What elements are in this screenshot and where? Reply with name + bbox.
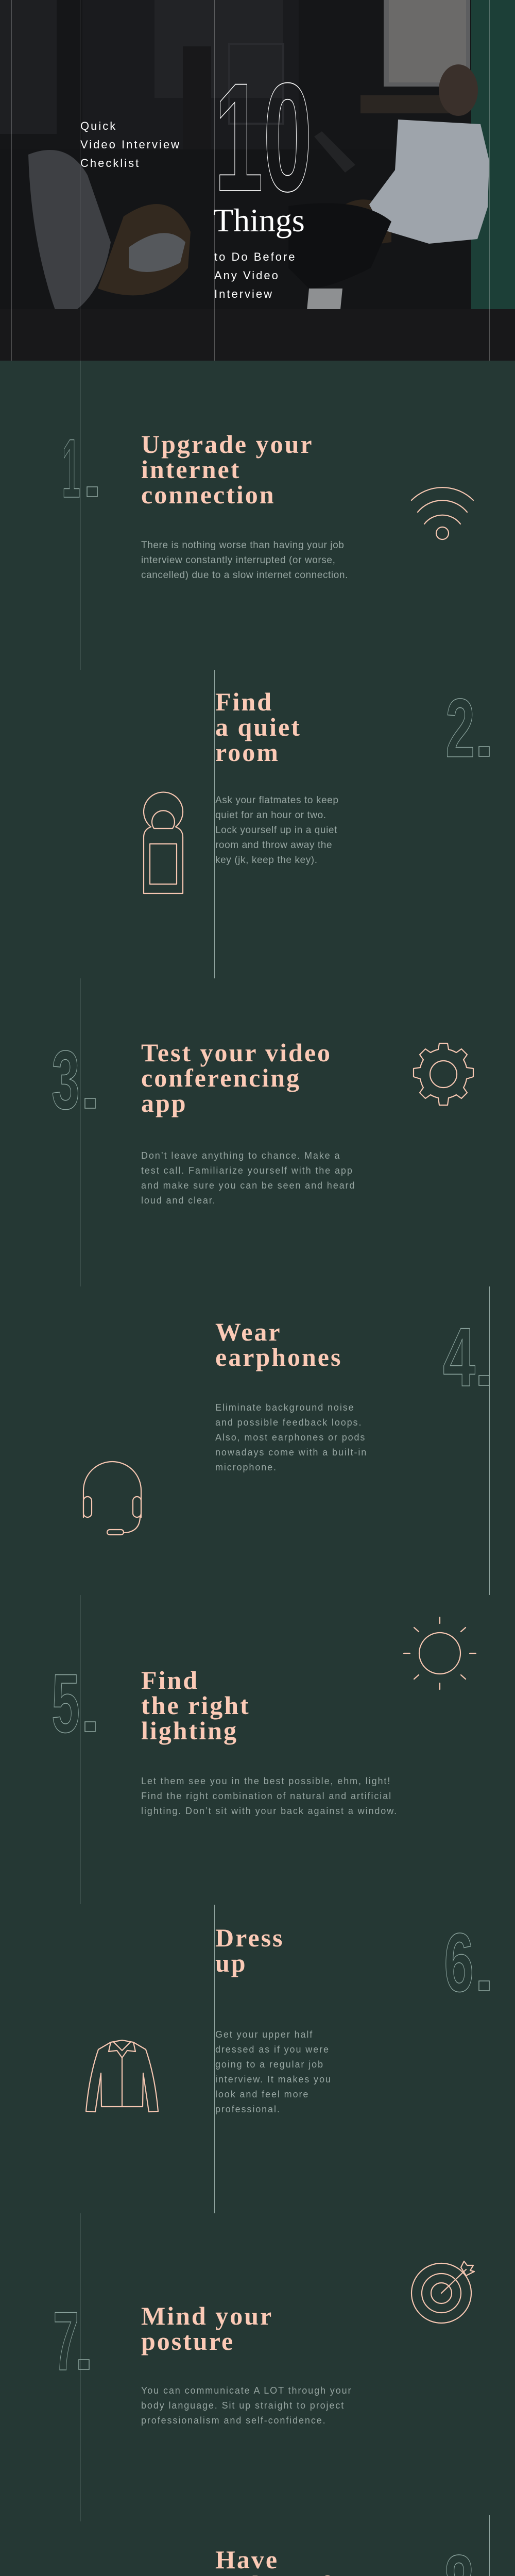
title 7: Mind your [141,2301,273,2330]
title 3 [141,1038,332,1117]
title 6: Dress [215,1923,284,1952]
icon: sun [403,1617,477,1690]
title 4 [215,1317,342,1371]
body 7: professionalism and self-confidence. [141,2415,327,2426]
icon: target [411,2261,475,2324]
section 7: posture [53,2213,475,2521]
body 2: quiet for an hour or two. [215,810,327,821]
body 3: loud and clear. [141,1195,216,1206]
header subtitle: Quick Video Interview Checklist: Checklist [80,157,140,170]
body 4 [215,1402,367,1472]
title 7 [141,2301,273,2355]
body 3: test call. Familiarize yourself with the app [141,1165,353,1176]
title 5: Find [141,1666,199,1694]
section 2: quiet room [143,670,490,978]
header title: Things: Things [213,202,305,239]
body 5: Let them see you in the best possible, ehm, light! [141,1776,391,1786]
body 4: Eliminate background noise [215,1402,355,1413]
body 4: and possible feedback loops. [215,1417,362,1428]
body 6: Get your upper half [215,2029,313,2040]
section 1: internet [62,361,474,670]
body 4: microphone. [215,1462,277,1472]
title 3: app [141,1089,187,1117]
body 7: You can communicate A LOT through your [141,2385,352,2396]
title 7: posture [141,2327,234,2355]
title 2: Find [215,687,273,716]
body 2: Lock yourself up in a quiet [215,825,337,836]
icon: door hanger [143,791,183,894]
body 5 [141,1776,398,1816]
body 6: going to a regular job [215,2059,324,2070]
section 3: test app [52,978,474,1286]
header subtitle: to Do Before Any Video Interview: to Do Before [214,250,297,263]
body 7 [141,2385,352,2426]
section 8: glass of water [215,2515,490,2576]
body 1: There is nothing worse than having your job [141,540,344,551]
title 4: earphones [215,1343,342,1371]
body 6 [215,2029,332,2114]
body 6: dressed as if you were [215,2044,330,2055]
title 1 [141,430,314,509]
title 2: room [215,738,280,767]
section 5: lighting [52,1595,477,1904]
body 5: Find the right combination of natural and artificial [141,1791,392,1801]
title 8 [215,2545,331,2576]
header subtitle: to Do Before Any Video Interview: Interview [214,287,273,300]
body 3 [141,1150,355,1206]
body 2 [215,795,338,866]
icon: jacket [85,2039,159,2112]
body 2: room and throw away the [215,840,332,851]
header subtitle: to Do Before Any Video Interview: Any Video [214,269,280,282]
icon: headset [82,1461,142,1535]
title 3: Test your video [141,1038,332,1067]
body 3: and make sure you can be seen and heard [141,1180,355,1191]
header subtitle: Quick Video Interview Checklist: Video Interview [80,138,181,151]
body 5: lighting. Don’t sit with your back against a window. [141,1806,398,1816]
header photo [0,0,515,361]
body 4: nowadays come with a built-in [215,1447,367,1458]
title 8: Have [215,2545,279,2574]
title 5 [141,1666,250,1745]
body 4: Also, most earphones or pods [215,1432,366,1443]
section 4: earphones [82,1286,490,1595]
body 2: Ask your flatmates to keep [215,795,338,806]
icon: gear [413,1043,474,1106]
title 5: the right [141,1691,250,1720]
title 1: internet [141,455,241,484]
title 1: connection [141,480,276,509]
body 2: key (jk, keep the key). [215,855,318,866]
body 3: Don’t leave anything to chance. Make a [141,1150,340,1161]
title 4: Wear [215,1317,282,1346]
body 1: interview constantly interrupted (or worse, [141,555,335,566]
title 5: lighting [141,1716,238,1745]
header subtitle: Quick Video Interview Checklist [80,120,181,170]
section 6: dress up [85,1905,490,2213]
icon: wifi [411,487,474,540]
body 1: cancelled) due to a slow internet connection. [141,570,348,581]
title 2 [215,687,301,767]
body 1 [141,540,348,581]
body 6: look and feel more [215,2089,309,2099]
body 6: professional. [215,2104,281,2114]
header subtitle: Quick Video Interview Checklist: Quick [80,120,117,132]
title 6: up [215,1948,247,1977]
header subtitle: to Do Before Any Video Interview [214,250,297,300]
title 3: conferencing [141,1063,301,1092]
title 1: Upgrade your [141,430,314,459]
title 2: a quiet [215,713,301,741]
body 7: body language. Sit up straight to project [141,2400,345,2411]
body 6: interview. It makes you [215,2074,332,2084]
title 6 [215,1923,284,1977]
